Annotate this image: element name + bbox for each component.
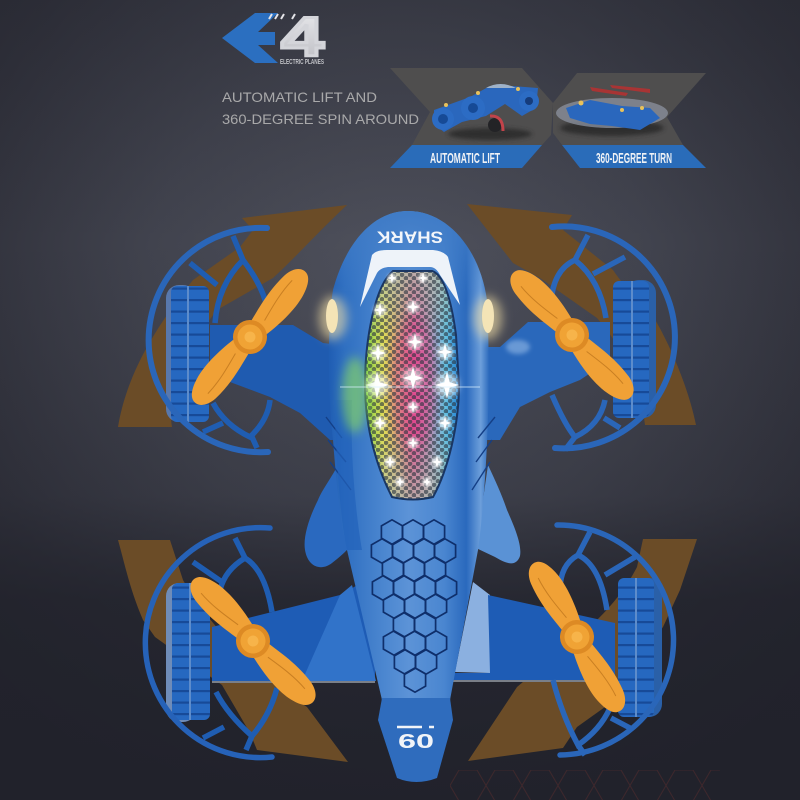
arrow icon: [222, 13, 278, 63]
arm highlight: [506, 340, 530, 354]
plane: bottom-left rotor: [145, 528, 376, 758]
wheel: [166, 583, 210, 722]
arm: [482, 322, 610, 440]
decorative brown X top-left: [118, 205, 347, 427]
wing trailing edge: [212, 681, 375, 683]
nose name: SHARK: [377, 228, 443, 246]
propeller: [184, 564, 322, 718]
LED panel: [365, 271, 459, 500]
lens flare: [340, 386, 480, 388]
faint floor honeycomb: [450, 770, 720, 800]
nose white swoosh: [360, 250, 460, 307]
wing: [453, 595, 615, 680]
wing: [212, 575, 375, 682]
green glow: [342, 357, 368, 433]
plane: top-left rotor: [149, 228, 340, 452]
propeller: [523, 552, 631, 722]
tail badge: [397, 727, 434, 753]
LED glints: [365, 273, 459, 487]
guard ribs: [190, 236, 270, 448]
honeycomb panel: [371, 520, 457, 692]
guard ring: [552, 226, 675, 448]
panel: 360-degree turn: [553, 73, 706, 168]
plane: bottom-right rotor: [453, 525, 674, 755]
label: automatic lift: AUTOMATIC LIFT: [430, 150, 500, 167]
guard ribs: [193, 538, 277, 750]
stripes above number: [269, 14, 295, 19]
guard ring: [149, 228, 268, 452]
left headlight: [319, 296, 347, 340]
wing trailing edge: [453, 680, 600, 682]
feature description: 360-DEGREE SPIN AROUND: [222, 111, 419, 127]
mini toy: spinning disc: [556, 98, 668, 136]
arm: [210, 325, 340, 440]
propeller: [178, 263, 322, 411]
guard ribs: [553, 532, 635, 755]
electric planes label: ELECTRIC PLANES: [280, 57, 324, 66]
label: 360-degree turn: 360-DEGREE TURN: [596, 150, 672, 167]
wing light panel: [302, 585, 376, 681]
guard ribs: [551, 235, 625, 450]
decorative brown X bottom-right: [468, 539, 697, 761]
plane: tail fins: [305, 465, 520, 567]
side body shading: [334, 400, 362, 550]
decorative brown X bottom-left: [118, 540, 348, 762]
feature description: AUTOMATIC LIFT AND: [222, 89, 377, 105]
wing light panel: [455, 582, 490, 673]
tail badge: 60: [398, 731, 434, 753]
number 4: 4: [281, 5, 324, 68]
propeller: [504, 257, 640, 413]
side vent marks: [326, 417, 495, 490]
plane: top-right rotor: [482, 226, 675, 450]
tail section: [378, 698, 453, 782]
wheel: [618, 578, 662, 717]
feature description: [222, 89, 419, 127]
wheel: [166, 285, 209, 422]
panel: automatic lift: [390, 68, 553, 168]
mini toy: lifted car: [432, 84, 539, 140]
right headlight: [474, 296, 502, 340]
wheel: [613, 280, 656, 418]
guard ring: [557, 525, 674, 755]
decorative brown X top-right: [467, 204, 696, 425]
plane: fuselage: [319, 211, 502, 782]
guard ring: [145, 528, 272, 758]
spin arrows: [590, 85, 650, 96]
